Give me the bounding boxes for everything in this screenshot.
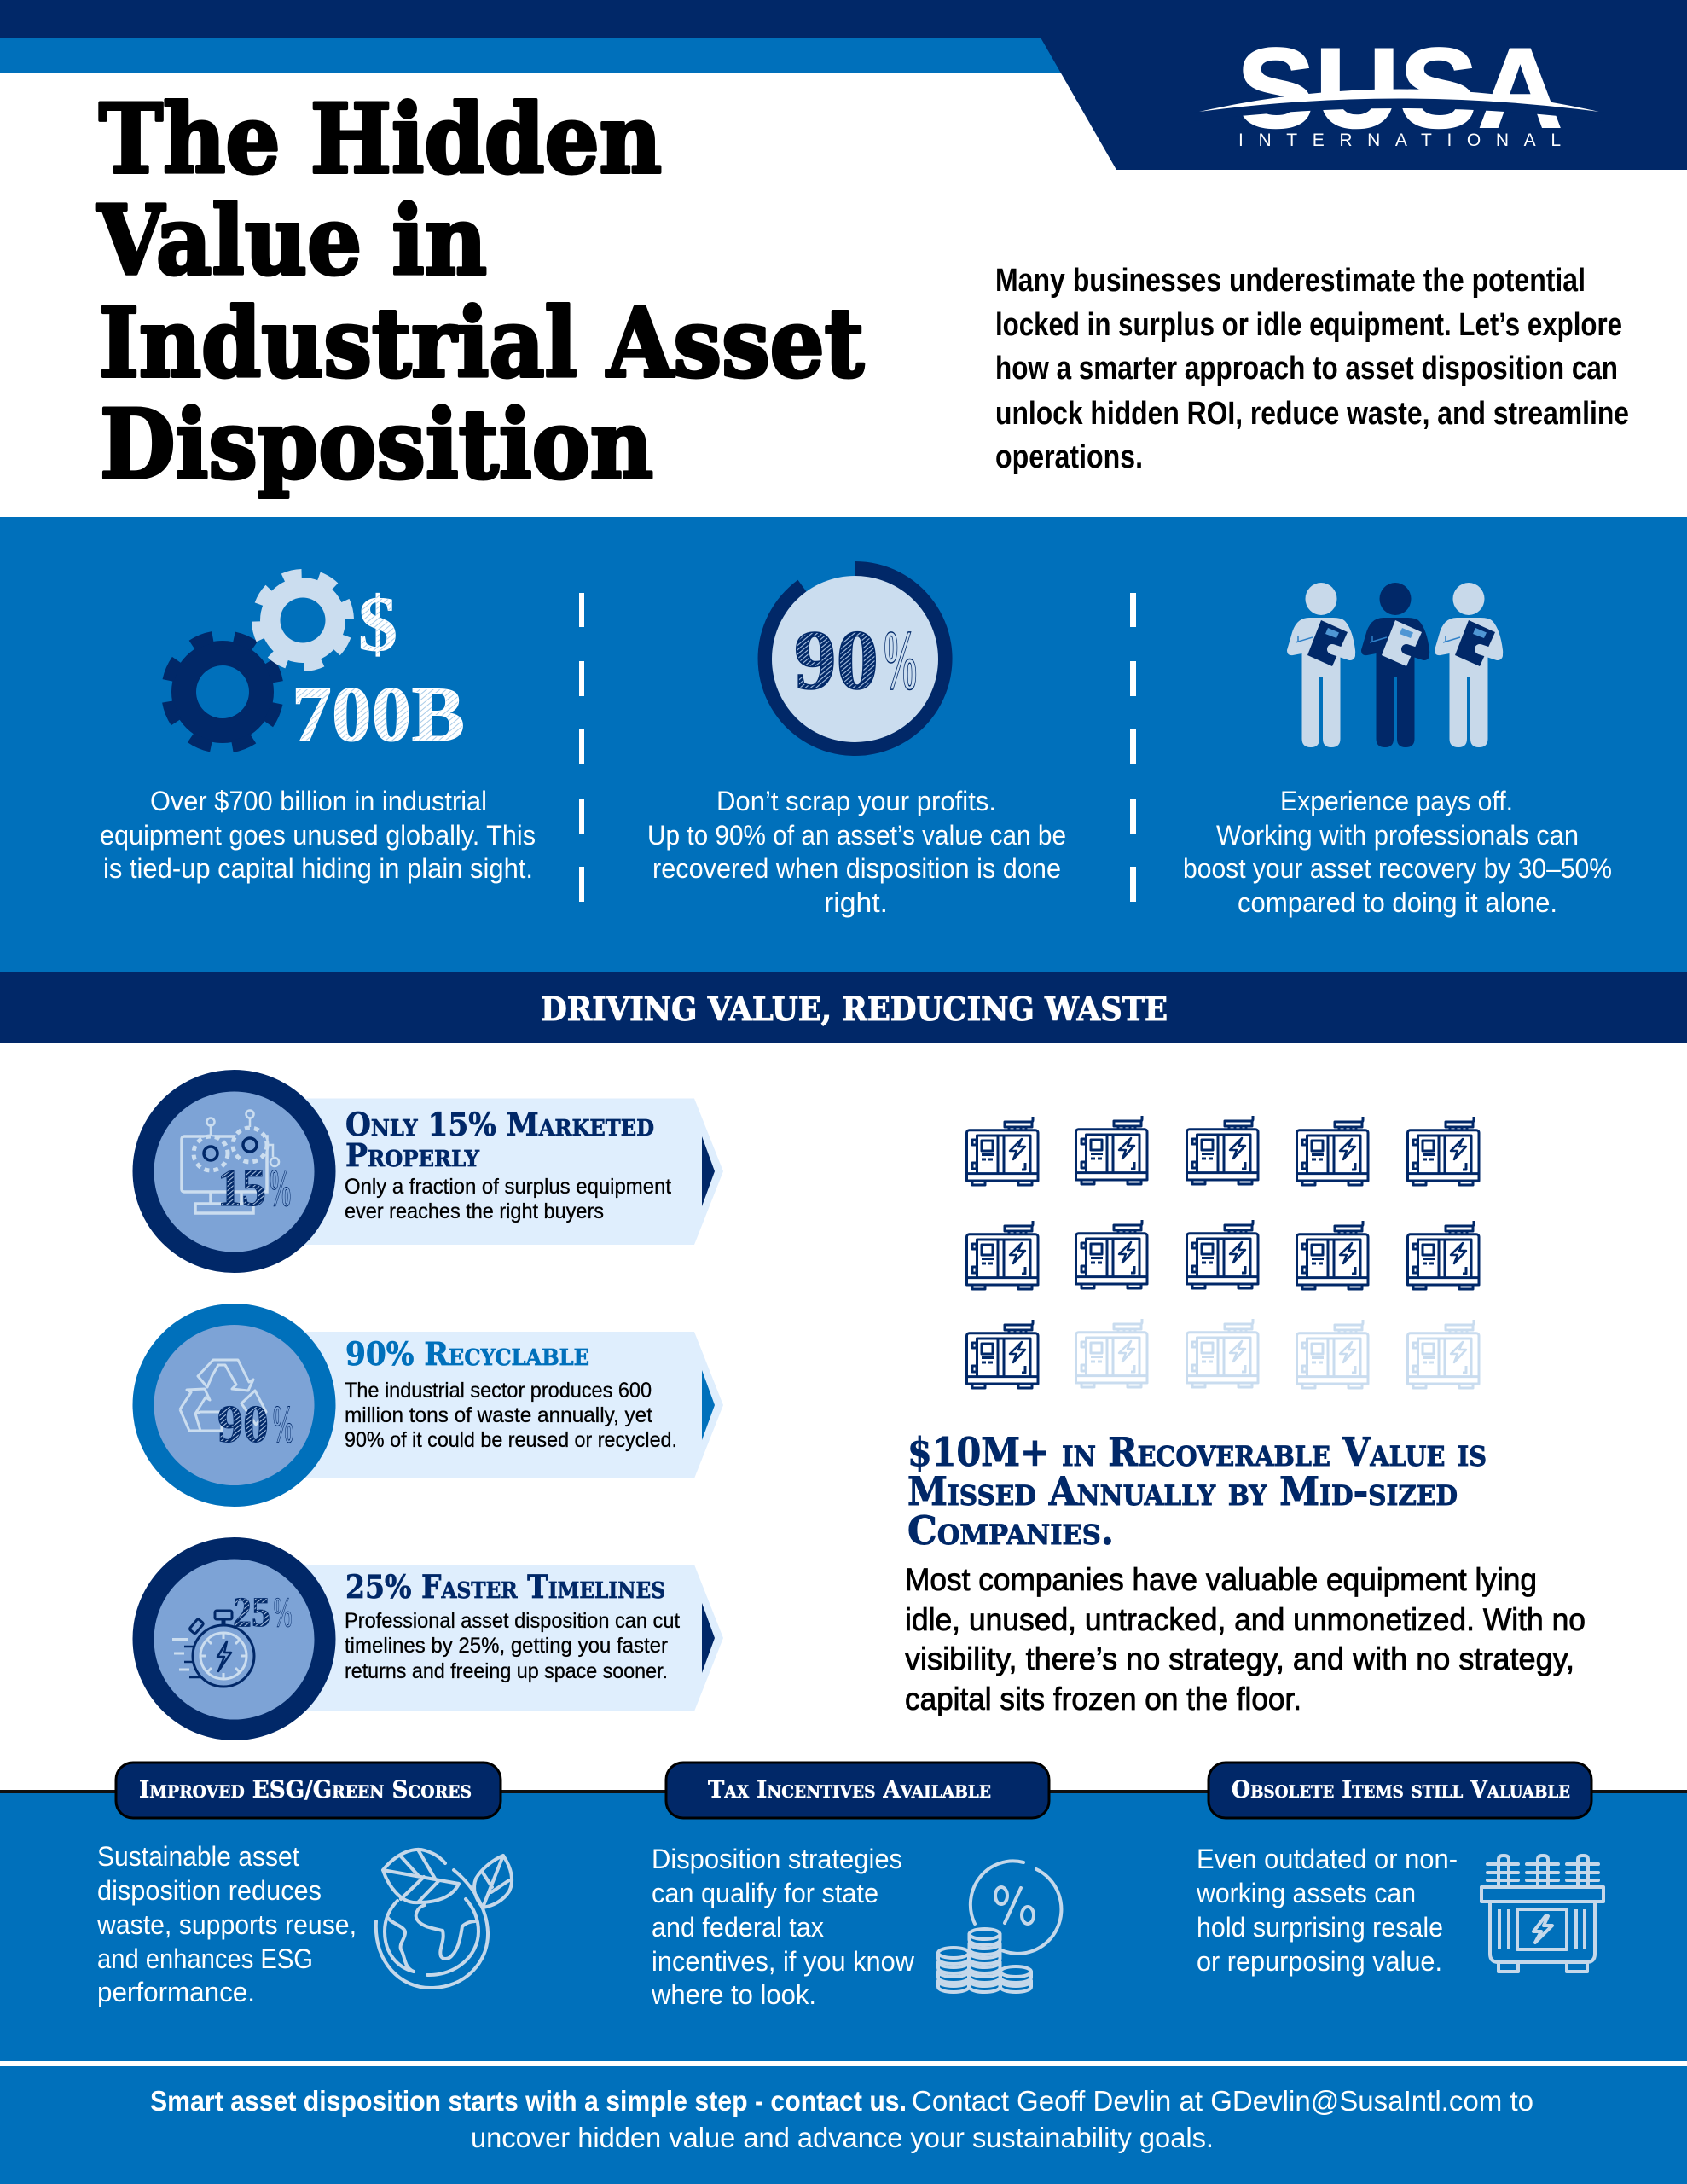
text: tax incentives: and federal tax [652, 1912, 824, 1943]
text: ESG: performance. [97, 1977, 255, 2007]
callout paragraph: idle, unused, untracked, and unmonetized. With no [905, 1602, 1586, 1637]
panel: 25% faster timelines [133, 1537, 723, 1740]
callout heading: $10M+ recoverable value: Missed Annually by Mid-sized [907, 1468, 1458, 1514]
stat text: 90% value [647, 786, 1066, 918]
heading and copy: ever reaches the right buyers [345, 1199, 604, 1223]
text: obsolete items [1196, 1844, 1458, 1977]
stat text: experience: compared to doing it alone. [1238, 887, 1557, 918]
stat text: 90% value: Don’t scrap your profits. [716, 786, 996, 816]
text: tax incentives: incentives, if you know [652, 1946, 915, 1977]
footer call to action: uncover hidden value and advance your sustainability goals. [471, 2122, 1214, 2153]
pill: tax incentives: Tax Incentives Available [708, 1775, 991, 1804]
icon: stopwatch [172, 1611, 254, 1687]
stat text: $700 billion [100, 786, 536, 884]
panel: 25% faster timelines: 25 [233, 1588, 270, 1635]
pill: obsolete items [1209, 1763, 1591, 1818]
title: Industrial Asset [99, 288, 864, 399]
heading and copy: million tons of waste annually, yet [345, 1403, 652, 1427]
chart: 90% donut: 90 [794, 613, 878, 707]
footer call to action: Contact Geoff Devlin at GDevlin@SusaIntl.com to [912, 2085, 1533, 2117]
text: ESG: Sustainable asset [97, 1841, 299, 1872]
stat text: $700 billion: Over $700 billion in industrial [150, 786, 487, 816]
text: ESG: disposition reduces [97, 1875, 322, 1906]
divider left [579, 593, 584, 902]
panel: only 15% marketed [133, 1070, 723, 1273]
icon: gears with $700B: 700B [292, 671, 465, 758]
icon: gears with $700B: $ [358, 580, 397, 667]
title: The Hidden [99, 84, 662, 195]
section heading: driving value: DRIVING VALUE, REDUCING WASTE [541, 990, 1168, 1028]
icon: transformer [1481, 1856, 1603, 1972]
text: obsolete items: Even outdated or non- [1197, 1844, 1458, 1874]
pill: tax incentives [666, 1763, 1049, 1818]
stat text: $700 billion: equipment goes unused globally. This [100, 820, 536, 851]
section heading: driving value [0, 972, 1687, 1043]
stat text: 90% value: Up to 90% of an asset’s value can be [647, 820, 1066, 851]
icon grid: generators, 11 of 15 highlighted [967, 1116, 1479, 1388]
text: tax incentives [651, 1844, 915, 2010]
icon: monitor with gears [182, 1111, 279, 1213]
text: obsolete items: hold surprising resale [1197, 1912, 1443, 1943]
pill: improved ESG [116, 1763, 501, 1818]
heading and copy: Only a fraction of surplus equipment [345, 1175, 671, 1199]
footer call to action: Smart asset disposition starts with a simple step - contact us. [150, 2085, 907, 2117]
pill: obsolete items: Obsolete Items still Valuable [1232, 1775, 1570, 1804]
panel: only 15% marketed: % [268, 1159, 293, 1217]
heading and copy [345, 1335, 677, 1452]
text: obsolete items: working assets can [1196, 1878, 1416, 1908]
icon: recycle arrows [180, 1360, 266, 1431]
callout heading: $10M+ recoverable value [907, 1429, 1487, 1554]
stat text: experience [1183, 786, 1612, 918]
title [96, 84, 864, 501]
panel: 90% recyclable: % [271, 1396, 295, 1454]
callout paragraph [905, 1562, 1586, 1716]
text: ESG: waste, supports reuse, [96, 1909, 357, 1940]
heading and copy: Professional asset disposition can cut [345, 1609, 680, 1633]
title: Disposition [100, 390, 653, 501]
stat text: experience: boost your asset recovery by 30–50% [1183, 853, 1612, 884]
chart: 90% donut [758, 561, 953, 756]
text: ESG [96, 1841, 357, 2007]
logo: SUSA International: SUSA [1237, 26, 1562, 152]
panel: 90% recyclable [133, 1304, 723, 1507]
stat text: 90% value: recovered when disposition is done [652, 853, 1061, 884]
heading and copy: 90% Recyclable [345, 1335, 589, 1373]
panel: only 15% marketed: 15 [217, 1159, 266, 1217]
heading and copy [345, 1568, 680, 1683]
stat text: experience: Experience pays off. [1280, 786, 1513, 816]
header band [0, 0, 1687, 170]
icon: three professionals with clipboards [1287, 583, 1503, 747]
text: tax incentives: where to look. [651, 1979, 816, 2010]
heading and copy: Properly [345, 1136, 479, 1174]
icon: globe with leaves [376, 1850, 512, 1988]
panel: 90% recyclable: 90 [217, 1396, 269, 1454]
callout heading: $10M+ recoverable value: Companies. [907, 1507, 1114, 1554]
heading and copy [345, 1106, 671, 1223]
divider right [1130, 593, 1136, 902]
stat text: experience: Working with professionals can [1216, 820, 1579, 851]
pill: improved ESG: Improved ESG/Green Scores [139, 1775, 472, 1804]
callout heading: $10M+ recoverable value: $10M+ in Recoverable Value is [907, 1429, 1487, 1475]
text: ESG: and enhances ESG [97, 1943, 313, 1974]
icon: percent and coin stacks [938, 1861, 1061, 1992]
heading and copy: Only 15% Marketed [345, 1106, 654, 1143]
icon: gears with $700B [157, 561, 465, 758]
stat text: $700 billion: is tied-up capital hiding in plain sight. [103, 853, 533, 884]
logo: SUSA International: INTERNATIONAL [1238, 131, 1561, 150]
heading and copy: returns and freeing up space sooner. [345, 1659, 668, 1683]
intro paragraph: Many businesses underestimate the potential [995, 263, 1586, 299]
footer call to action [0, 2061, 1687, 2184]
text: tax incentives: Disposition strategies [652, 1844, 902, 1874]
heading and copy: 25% Faster Timelines [345, 1568, 665, 1606]
callout paragraph: capital sits frozen on the floor. [905, 1682, 1301, 1716]
intro paragraph [995, 263, 1629, 475]
panel: key statistics [0, 517, 1687, 972]
stat text: 90% value: right. [824, 887, 888, 918]
panel: 25% faster timelines: % [272, 1588, 293, 1635]
heading and copy: timelines by 25%, getting you faster [345, 1634, 668, 1658]
intro paragraph: operations. [995, 439, 1143, 475]
text: tax incentives: can qualify for state [652, 1878, 878, 1908]
panel: bottom benefits [0, 1763, 1687, 2061]
heading and copy: The industrial sector produces 600 [345, 1379, 652, 1403]
text: obsolete items: or repurposing value. [1197, 1946, 1442, 1977]
callout paragraph: visibility, there’s no strategy, and with no strategy, [905, 1641, 1574, 1676]
title: Value in [96, 186, 487, 297]
chart: 90% donut: % [881, 613, 919, 707]
callout paragraph: Most companies have valuable equipment lying [905, 1562, 1537, 1597]
heading and copy: 90% of it could be reused or recycled. [345, 1428, 677, 1452]
